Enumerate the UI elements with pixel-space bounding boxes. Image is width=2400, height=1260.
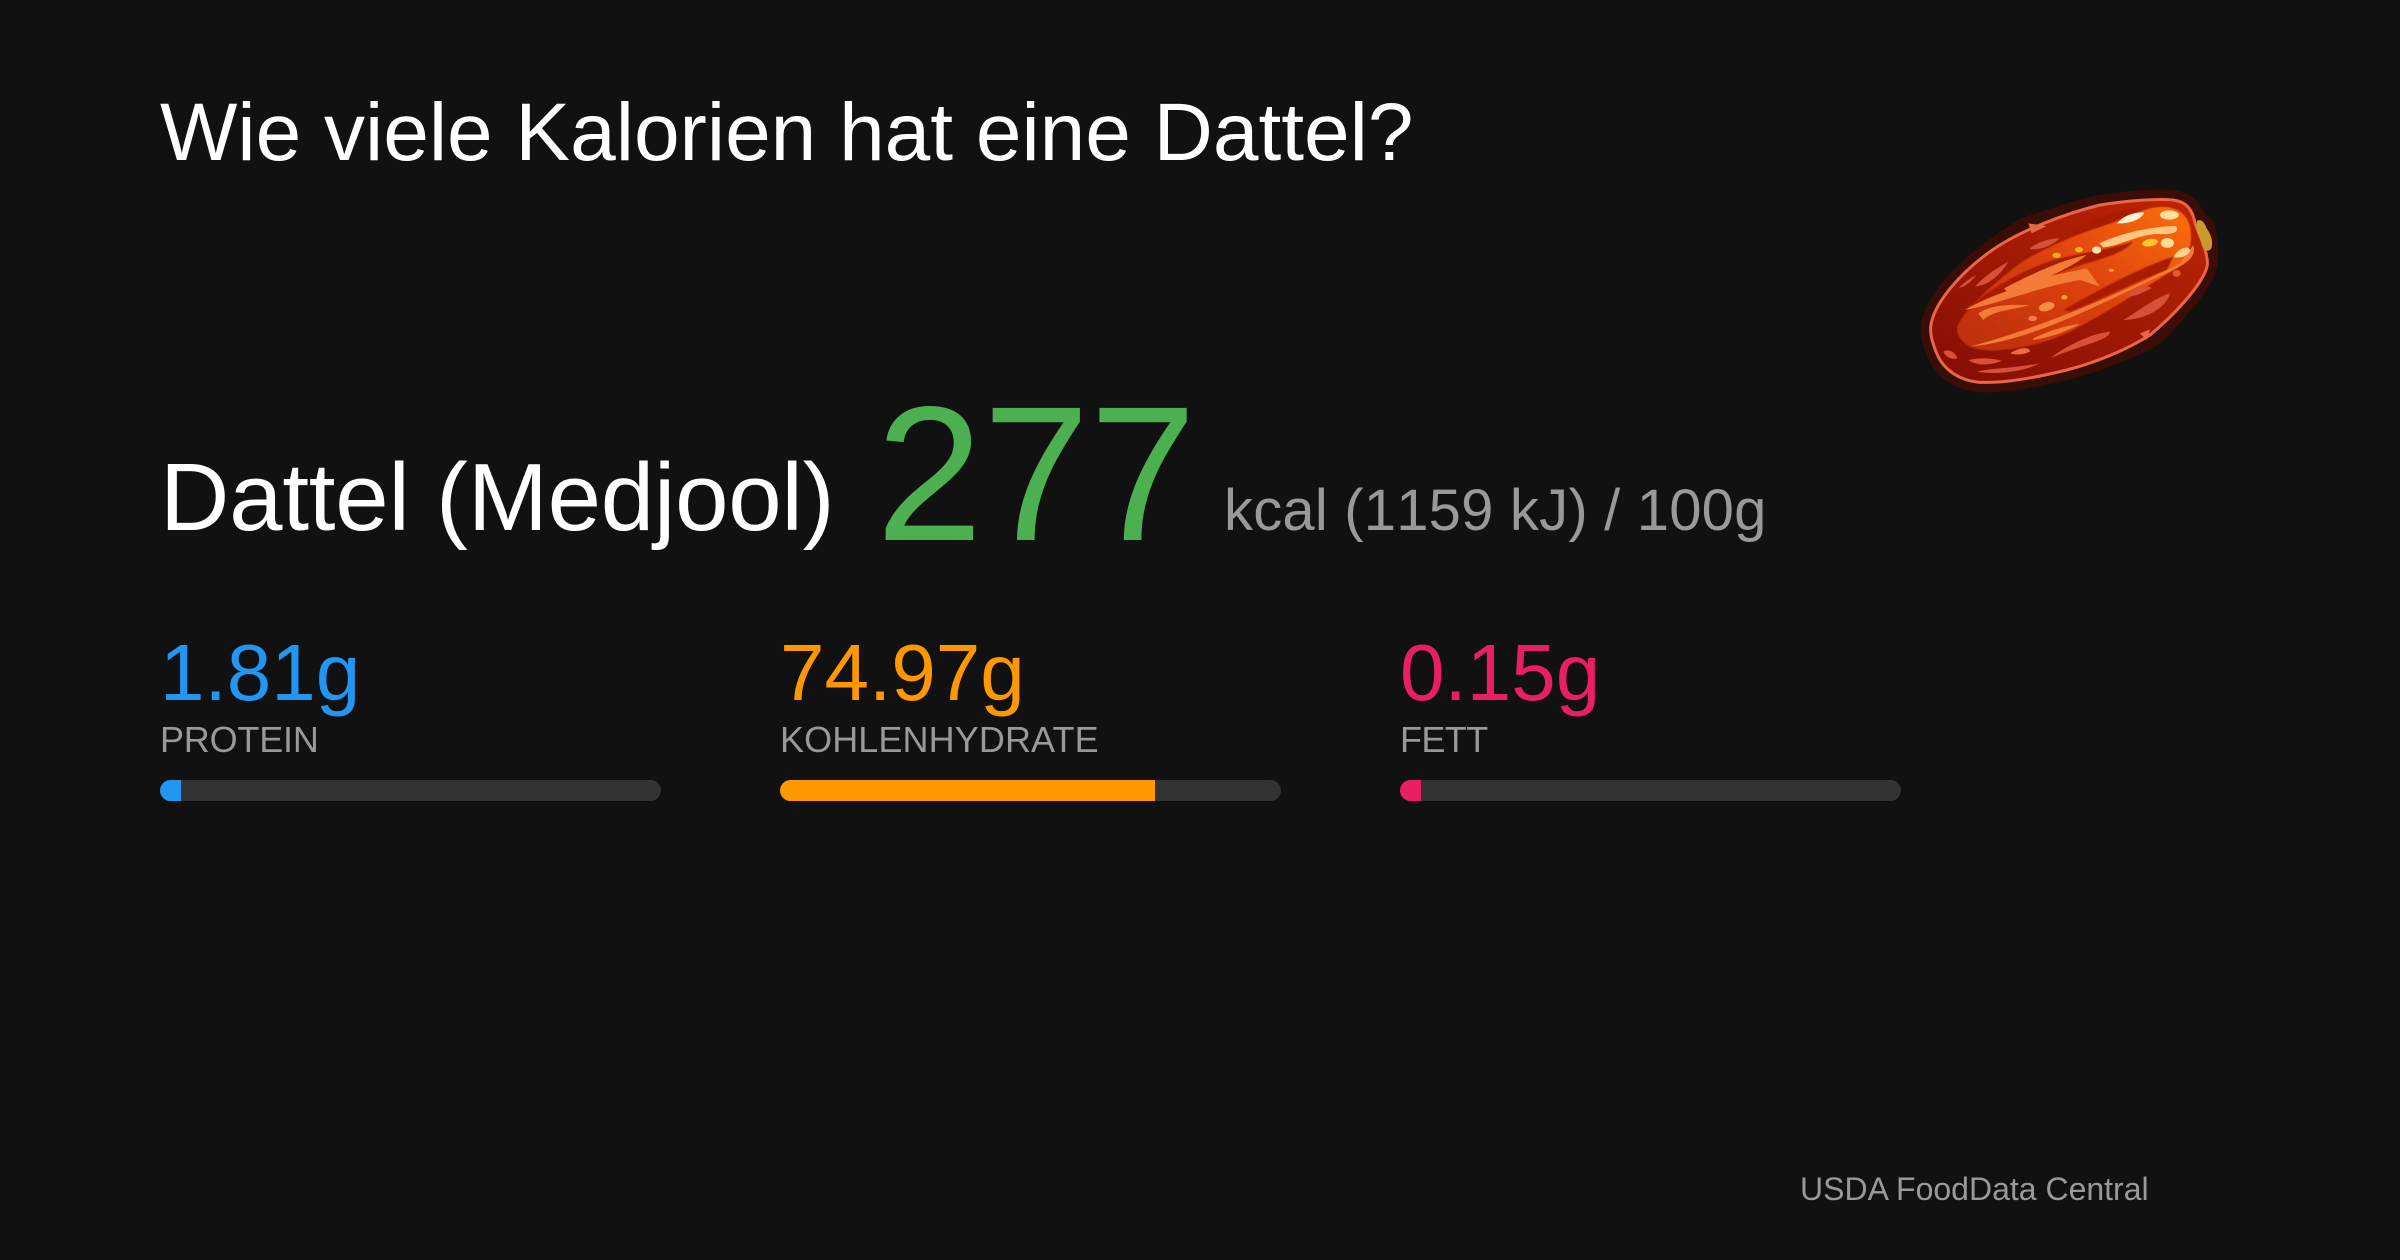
carbohydrate amount: 74.97g (780, 628, 1025, 717)
date halo (1931, 199, 2208, 382)
date dark folds (1963, 208, 2173, 312)
fat bar (1400, 780, 1901, 801)
fat label: FETT (1400, 719, 1488, 760)
date core (1957, 207, 2191, 350)
icon: date fruit (1931, 199, 2212, 382)
fat amount: 0.15g (1400, 628, 1600, 717)
date dull red marks (1943, 223, 2170, 373)
carbohydrate bar (780, 780, 1281, 801)
date light streaks (1965, 245, 2194, 347)
protein amount: 1.81g (160, 628, 360, 717)
date body (1931, 199, 2207, 382)
carbohydrate label: KOHLENHYDRATE (780, 719, 1099, 760)
date stem (2196, 220, 2212, 251)
source credit: USDA FoodData Central (1800, 1171, 2149, 1207)
calorie unit: kcal (1159 kJ) / 100g (1224, 478, 1767, 543)
protein label: PROTEIN (160, 719, 319, 760)
panel: carbohydrates (780, 628, 1281, 801)
title: Wie viele Kalorien hat eine Dattel? (160, 87, 1413, 178)
protein bar (160, 780, 661, 801)
panel: fat (1400, 628, 1901, 801)
date glossy highlights (2028, 210, 2190, 321)
calorie value: 277 (876, 366, 1196, 581)
food name: Dattel (Medjool) (160, 444, 834, 551)
panel: protein (160, 628, 661, 801)
